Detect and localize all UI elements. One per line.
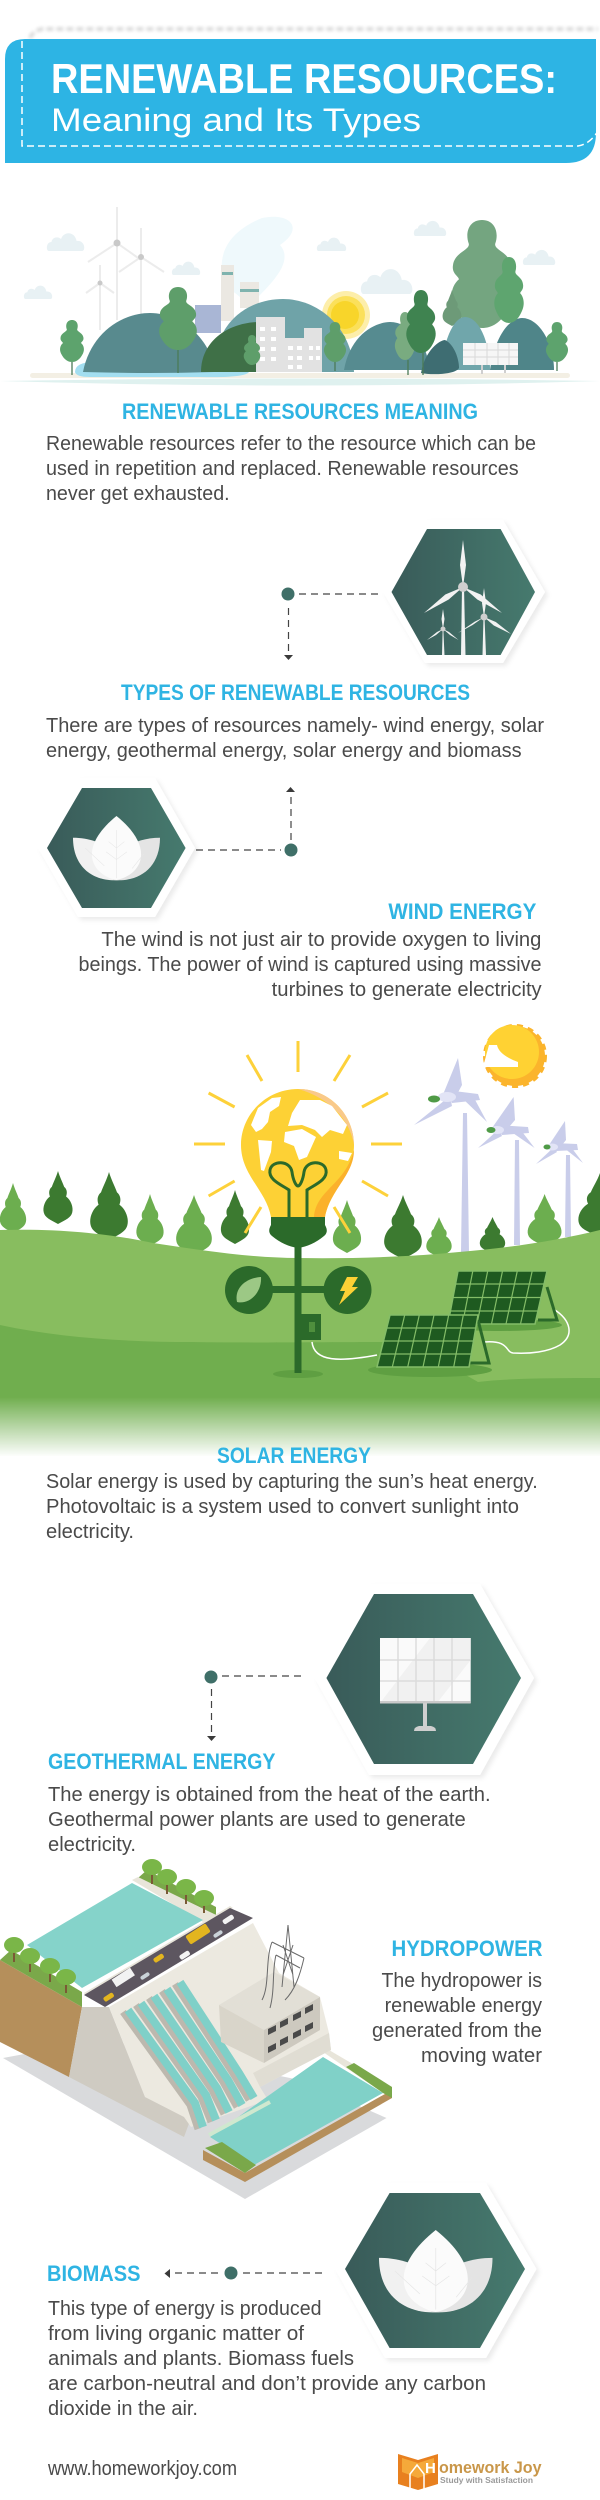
section: geothermal energy bbox=[48, 1749, 491, 1856]
section: biomass bbox=[47, 2261, 486, 2420]
body text: Geothermal power plants are used to generate bbox=[48, 1809, 466, 1831]
icon: wind turbines hexagon bbox=[383, 520, 545, 663]
heading: GEOTHERMAL ENERGY bbox=[48, 1749, 276, 1774]
body text: animals and plants. Biomass fuels bbox=[48, 2348, 354, 2370]
title: RENEWABLE RESOURCES: bbox=[51, 55, 557, 102]
header banner bbox=[5, 29, 598, 163]
section: hydropower bbox=[372, 1936, 543, 2067]
rays bbox=[194, 1041, 402, 1233]
body text: electricity. bbox=[48, 1834, 136, 1856]
icon: biomass leaves hexagon bbox=[335, 2183, 536, 2358]
body text: Photovoltaic is a system used to convert sunlight into bbox=[46, 1496, 519, 1518]
body text: The energy is obtained from the heat of the earth. bbox=[48, 1784, 491, 1806]
body text: Solar energy is used by capturing the sun’s heat energy. bbox=[46, 1471, 538, 1493]
body text: electricity. bbox=[46, 1521, 134, 1543]
body text: beings. The power of wind is captured using massive bbox=[78, 954, 542, 976]
section: renewable resources meaning bbox=[46, 399, 536, 505]
subtitle: Meaning and Its Types bbox=[51, 102, 421, 138]
body text: dioxide in the air. bbox=[48, 2398, 198, 2420]
trees on dam bbox=[4, 1859, 214, 1993]
body text bbox=[48, 2298, 486, 2420]
body text: Renewable resources refer to the resource which can be bbox=[46, 433, 536, 455]
body text: moving water bbox=[421, 2045, 542, 2067]
icon: leaves hexagon bbox=[38, 778, 195, 917]
body text: This type of energy is produced bbox=[48, 2298, 322, 2320]
body text bbox=[46, 433, 536, 505]
logo name: omework Joy bbox=[439, 2458, 542, 2477]
icon: sun bbox=[483, 1025, 545, 1086]
body text: are carbon-neutral and don’t provide any carbon bbox=[48, 2373, 486, 2395]
heading: HYDROPOWER bbox=[392, 1936, 543, 1961]
heading: SOLAR ENERGY bbox=[217, 1443, 371, 1468]
heading: BIOMASS bbox=[47, 2261, 140, 2286]
body text bbox=[46, 1471, 538, 1543]
illustration: hydropower dam bbox=[0, 1859, 392, 2199]
body text: The hydropower is bbox=[382, 1970, 542, 1992]
spillways bbox=[123, 1982, 270, 2135]
body text: used in repetition and replaced. Renewable resources bbox=[46, 458, 519, 480]
section: wind energy bbox=[78, 899, 542, 1001]
arrow: connector to types text bbox=[196, 787, 298, 856]
body text bbox=[46, 715, 544, 762]
icon: leaf bbox=[237, 1277, 261, 1302]
body text bbox=[48, 1784, 491, 1856]
body text: energy, geothermal energy, solar energy and biomass bbox=[46, 740, 522, 762]
solar panels bbox=[312, 1271, 569, 1377]
icon: open book bbox=[398, 2454, 438, 2490]
green hills bbox=[0, 1230, 600, 1466]
illustration: light bulb globe, wind turbines and solar panels bbox=[0, 1025, 600, 1466]
body text: never get exhausted. bbox=[46, 483, 230, 505]
section: solar energy bbox=[46, 1443, 538, 1543]
transmission tower bbox=[262, 1925, 304, 2008]
illustration: green landscape with city bbox=[0, 207, 600, 386]
arrow: connector to biomass heading bbox=[164, 2266, 326, 2280]
website url: www.homeworkjoy.com bbox=[47, 2458, 237, 2480]
body text: generated from the bbox=[372, 2020, 542, 2042]
body text: turbines to generate electricity bbox=[272, 979, 542, 1001]
road vehicles bbox=[103, 1914, 235, 2002]
body text: from living organic matter of bbox=[48, 2323, 304, 2345]
icon: globe light bulb bbox=[241, 1089, 354, 1248]
wind turbines bbox=[414, 1058, 583, 1252]
body text: renewable energy bbox=[385, 1995, 542, 2017]
body text: There are types of resources namely- wind energy, solar bbox=[46, 715, 544, 737]
body text: The wind is not just air to provide oxygen to living bbox=[101, 929, 541, 951]
heading: RENEWABLE RESOURCES MEANING bbox=[122, 399, 478, 424]
arrow: connector to geothermal heading bbox=[204, 1670, 306, 1741]
icon: open book: H bbox=[425, 2460, 436, 2477]
signpost with leaf and bolt icons bbox=[225, 1245, 372, 1378]
icon: solar panel hexagon bbox=[315, 1584, 534, 1775]
body text bbox=[78, 929, 542, 1001]
logo: homework joy bbox=[398, 2454, 542, 2490]
power house building bbox=[219, 1972, 331, 2087]
body text bbox=[372, 1970, 542, 2067]
tree line bbox=[0, 1171, 600, 1259]
heading: TYPES OF RENEWABLE RESOURCES bbox=[121, 680, 470, 705]
icon: lightning bolt bbox=[339, 1277, 358, 1305]
section: types of renewable resources bbox=[46, 680, 544, 762]
arrow: connector to types heading bbox=[282, 588, 383, 660]
heading: WIND ENERGY bbox=[388, 899, 537, 924]
logo tagline: Study with Satisfaction bbox=[440, 2476, 533, 2485]
